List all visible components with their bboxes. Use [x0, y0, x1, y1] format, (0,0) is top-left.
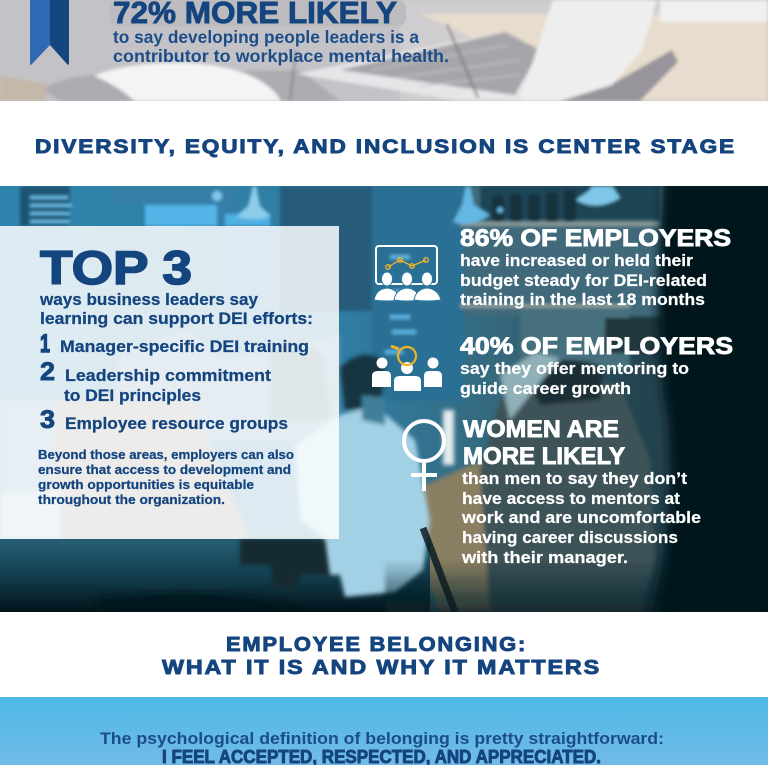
text block: 72% more likely: contributor to workplace mental health. — [113, 46, 449, 66]
stat: women are more likely — [461, 416, 701, 567]
heading: employee belonging: EMPLOYEE BELONGING: — [226, 634, 527, 656]
stat: 40% of employers: 40% OF EMPLOYERS — [460, 333, 733, 360]
heading: diversity, equity, and inclusion: DIVERSITY, EQUITY, AND INCLUSION IS CENTER STAGE — [35, 136, 736, 158]
list item 3: 3 — [40, 406, 55, 434]
list item 2: to DEI principles — [64, 387, 201, 405]
heading: top 3: TOP 3 — [40, 241, 192, 294]
text: psychological definition: The psychological definition of belonging is pretty straightforward: — [100, 729, 664, 748]
stat: women are more likely: WOMEN ARE — [463, 416, 619, 443]
list item 1: 1 — [40, 330, 50, 358]
heading: employee belonging: WHAT IT IS AND WHY IT MATTERS — [162, 657, 601, 679]
stat: women are more likely: have access to mentors at — [462, 490, 681, 508]
panel: belonging definition — [0, 697, 768, 765]
lower-left dark furniture — [0, 539, 430, 612]
text block: 72% more likely: to say developing people leaders is a — [113, 27, 419, 47]
dark right edge — [650, 180, 768, 620]
list item 3 — [40, 406, 288, 434]
text: beyond those areas: ensure that access to development and — [38, 462, 291, 477]
text: beyond those areas: growth opportunities is equitable — [38, 477, 254, 492]
icon: blue ribbon bookmark — [30, 0, 69, 65]
text: beyond those areas — [38, 447, 294, 507]
panel: top desk photo banner — [0, 0, 768, 101]
list item 1: Manager-specific DEI training — [60, 338, 309, 356]
stat: 86% of employers: have increased or held their — [460, 252, 694, 270]
stat: 86% of employers — [460, 225, 731, 309]
text: beyond those areas: Beyond those areas, employers can also — [38, 447, 294, 462]
stat: women are more likely: having career discussions — [462, 529, 678, 547]
text: beyond those areas: throughout the organization. — [38, 492, 225, 507]
list item 3: Employee resource groups — [65, 415, 288, 433]
stat: 40% of employers — [460, 333, 733, 398]
list item 2 — [40, 358, 272, 405]
list item 1 — [40, 330, 309, 358]
stat: 40% of employers: guide career growth — [460, 380, 631, 398]
stat: 86% of employers: budget steady for DEI-related — [460, 272, 707, 290]
list item 2: Leadership commitment — [65, 367, 272, 385]
stat: 40% of employers: say they offer mentoring to — [460, 360, 689, 378]
text: card intro: learning can support DEI efforts: — [40, 310, 313, 328]
stat: women are more likely: MORE LIKELY — [463, 443, 625, 470]
text: card intro — [39, 291, 313, 328]
stat: women are more likely: with their manager. — [461, 549, 628, 567]
text: card intro: ways business leaders say — [39, 291, 259, 309]
list item 2: 2 — [40, 358, 55, 386]
icon: mentor group with magnifier — [372, 346, 442, 391]
icon: female symbol — [404, 421, 444, 491]
icon: presentation board with audience — [374, 246, 441, 301]
panel: office meeting photo — [0, 180, 768, 620]
panel: top 3 translucent card — [0, 226, 339, 539]
stat: 86% of employers: 86% OF EMPLOYERS — [460, 225, 731, 252]
stat: women are more likely: than men to say they don’t — [462, 470, 688, 488]
text block: 72% more likely — [113, 0, 449, 66]
stat: women are more likely: work and are uncomfortable — [461, 509, 701, 527]
heading: employee belonging — [162, 634, 601, 679]
stat: 86% of employers: training in the last 18 months — [460, 291, 705, 309]
